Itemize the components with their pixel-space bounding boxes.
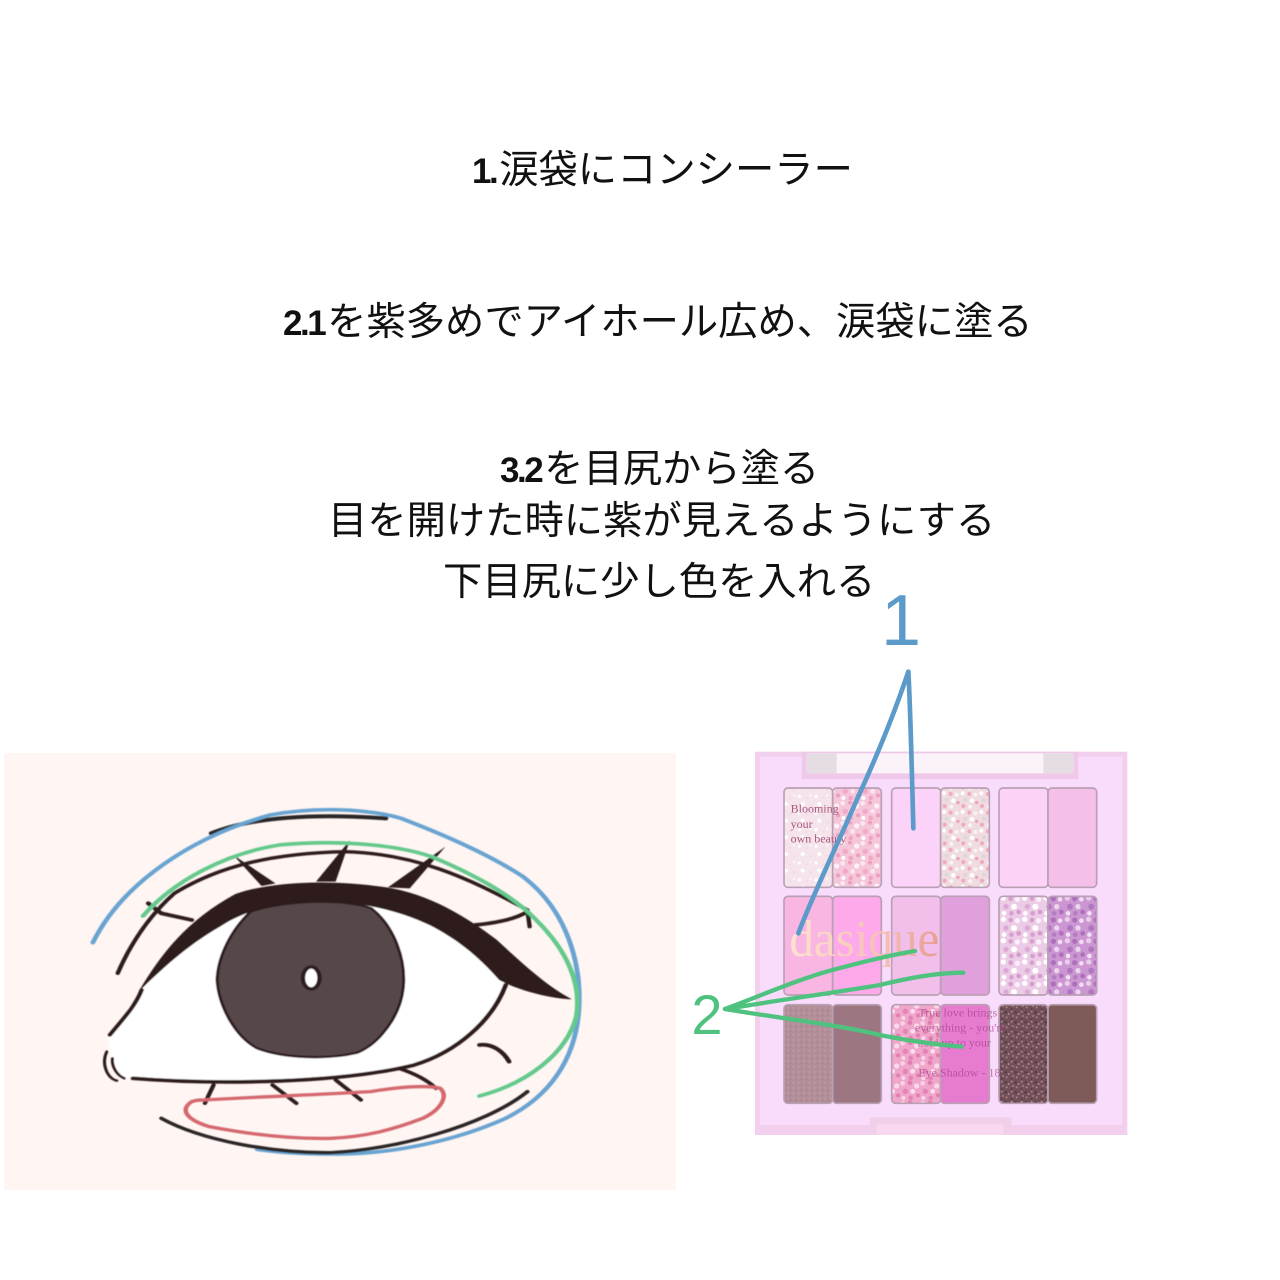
tear duct marks [105, 1052, 124, 1081]
palette small copy: everything - you're [915, 1020, 1006, 1034]
palette tagline: own beauty [791, 832, 846, 846]
green arrows: colour 2 [725, 951, 963, 1047]
green line: range 2 [143, 843, 577, 1096]
upper tapered lashes [233, 840, 445, 888]
upper crease [118, 852, 530, 973]
palette brand name: dasique [789, 911, 939, 968]
step 2 text: 2.1を紫多めでアイホール広め、涙袋に塗る [283, 300, 1033, 344]
lower lashes [205, 1068, 436, 1103]
red line: tear bag area [186, 1087, 444, 1138]
palette tagline: Blooming [791, 802, 839, 816]
palette small copy: hold up to your [917, 1036, 991, 1050]
step 3 detail line 2: 下目尻に少し色を入れる [443, 560, 875, 604]
palette small copy: Eye Shadow - 18 [918, 1066, 1001, 1080]
pan row 1 [784, 788, 1097, 887]
step 3 heading text: 3.2を目尻から塗る [500, 447, 819, 491]
eye white [108, 895, 508, 1081]
brow arc [211, 816, 386, 833]
upper eyeliner [139, 882, 572, 999]
palette top clasp [802, 752, 1078, 779]
palette bottom clasp [870, 1117, 1012, 1135]
upper lash side marks [148, 903, 527, 925]
label: number 1: 1 [881, 581, 921, 661]
lower lid line [133, 985, 506, 1082]
inner corner line [110, 990, 142, 1035]
iris [217, 902, 404, 1057]
palette small copy: True love brings [918, 1006, 997, 1020]
panel: eye diagram [4, 753, 676, 1190]
panel: eyeshadow palette [725, 672, 1127, 1135]
pan row 2 [784, 896, 1097, 995]
step 1 text: 1.涙袋にコンシーラー [472, 148, 853, 192]
pan row 3 [784, 1005, 1097, 1103]
outer lower mark [479, 1045, 509, 1062]
blue arrow: colour 1 [798, 672, 913, 933]
lower contour line [161, 1092, 527, 1153]
palette tagline: your [791, 817, 813, 831]
eye panel background [4, 753, 676, 1190]
label: number 2: 2 [691, 983, 723, 1046]
pupil highlight [303, 967, 320, 989]
step 3 detail line 1: 目を開けた時に紫が見えるようにする [328, 499, 995, 543]
palette body [755, 752, 1127, 1135]
blue line: range 1 [93, 810, 579, 1154]
